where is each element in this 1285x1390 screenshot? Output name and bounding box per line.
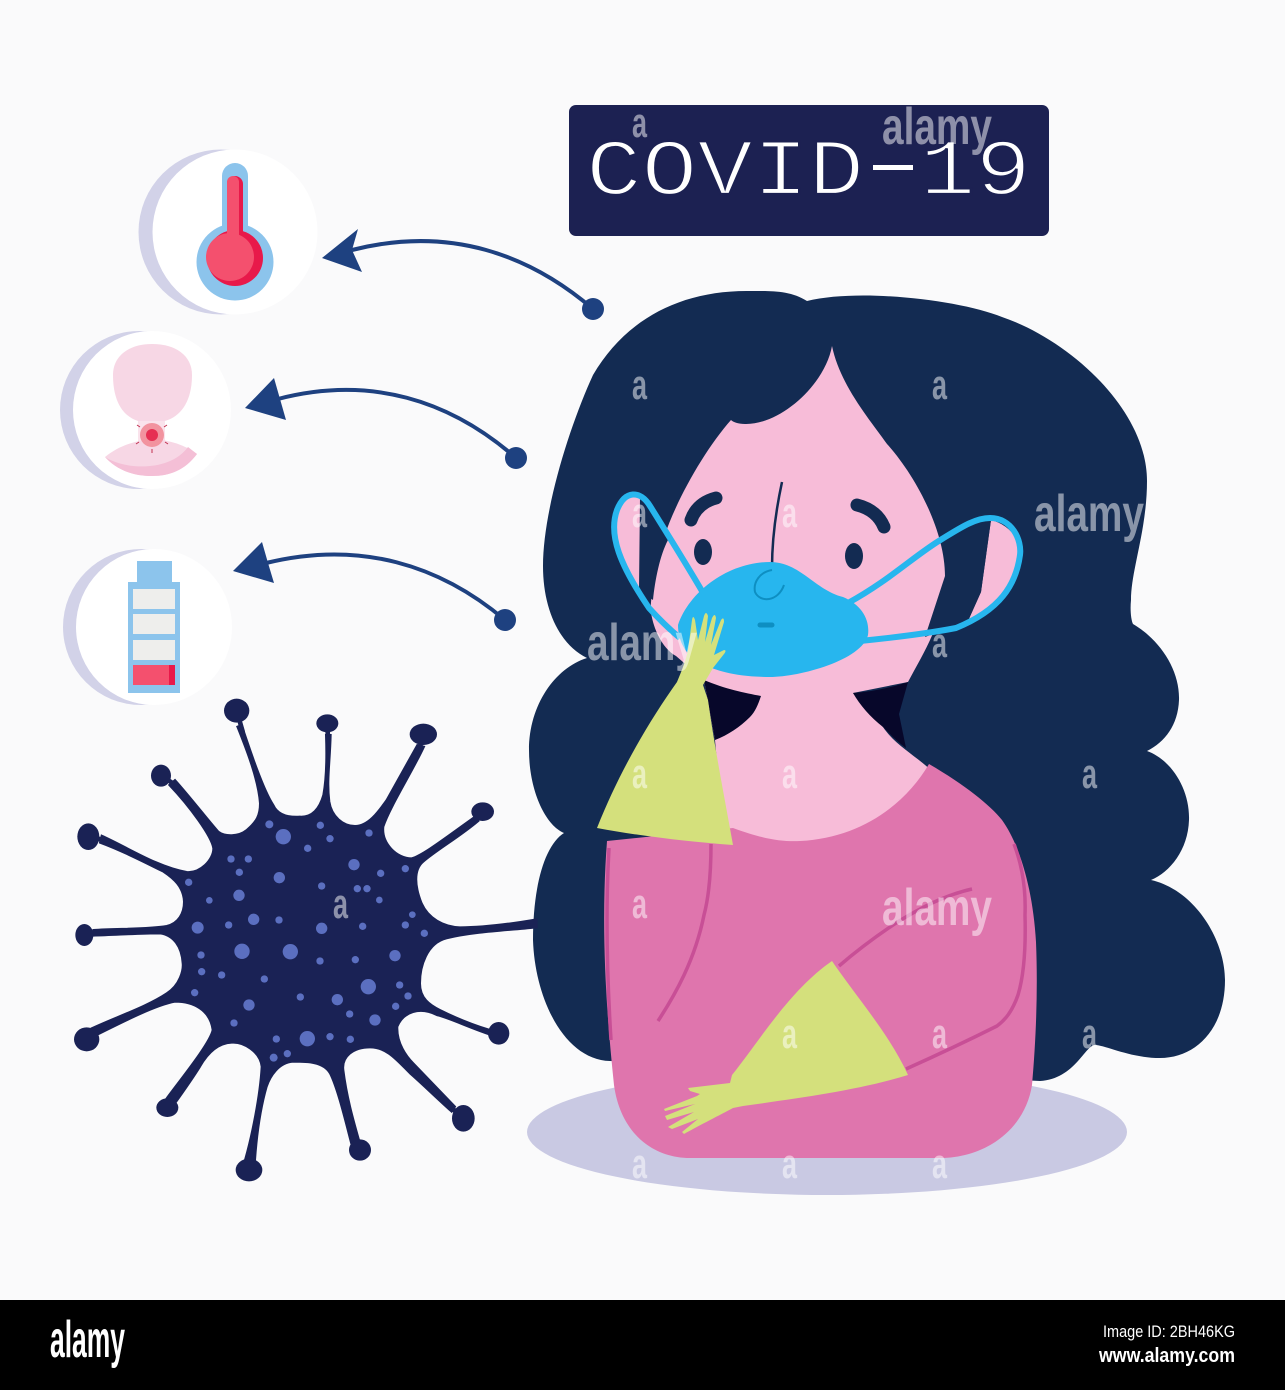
nose line [772,482,782,568]
bottom black stock-photo strip: www.alamy.com [1098,1345,1235,1367]
watermarks: a [1082,750,1097,797]
watermarks: a [632,880,647,927]
icon: thermometer / fever [138,150,318,314]
watermarks: alamy [882,98,992,156]
title banner: COVID-19 [586,128,1031,219]
watermarks: a [932,1010,947,1057]
watermarks: a [333,880,348,927]
face and neck [651,346,945,870]
watermarks: a [632,99,647,146]
left eyebrow [691,498,716,520]
icon: sore throat [60,331,231,489]
watermarks: a [632,489,647,536]
neck shadow right [853,682,908,748]
watermarks: a [782,1010,797,1057]
watermarks: a [632,1140,647,1187]
virus spike tips [74,699,509,1181]
watermarks: a [932,361,947,408]
right ear [968,520,1020,621]
woman figure [529,291,1225,1158]
hair [529,291,1225,1081]
watermarks: a [782,489,797,536]
neck shadow left [704,680,761,740]
watermarks: a [632,750,647,797]
virus [74,699,537,1181]
left hair strip over ear [639,497,668,600]
lower glove [664,961,908,1134]
title banner [569,105,1049,236]
bottom black stock-photo strip [0,1300,1285,1390]
shirt [604,764,1037,1158]
watermarks: a [932,619,947,666]
watermarks [333,98,1144,1187]
watermarks: alamy [587,614,697,672]
blue mask [678,562,868,677]
mask details [755,570,784,625]
left eye [694,539,712,565]
virus dots [185,820,428,1062]
mask straps [614,494,1020,641]
right eye [845,543,863,569]
shirt fold lines [607,844,1025,1069]
watermarks: alamy [882,879,992,937]
watermarks: alamy [1034,485,1144,543]
watermarks: a [932,1140,947,1187]
right eyebrow [857,505,884,527]
arrow: sore throat [245,378,527,469]
shadow ellipse under woman [527,1069,1127,1195]
virus body and spikes [92,725,537,1160]
arrow: fatigue [233,542,516,631]
icon: low battery / fatigue [63,549,232,705]
right hair strip over ear [925,520,991,637]
watermarks: a [632,361,647,408]
watermarks: a [782,750,797,797]
watermarks: a [782,1140,797,1187]
arrow: fever [322,229,604,320]
bottom black stock-photo strip: alamy [50,1311,125,1369]
left ear [614,496,640,592]
raised glove [597,613,733,845]
bottom black stock-photo strip: Image ID: 2BH46KG [1103,1322,1235,1341]
watermarks: a [1082,1010,1097,1057]
